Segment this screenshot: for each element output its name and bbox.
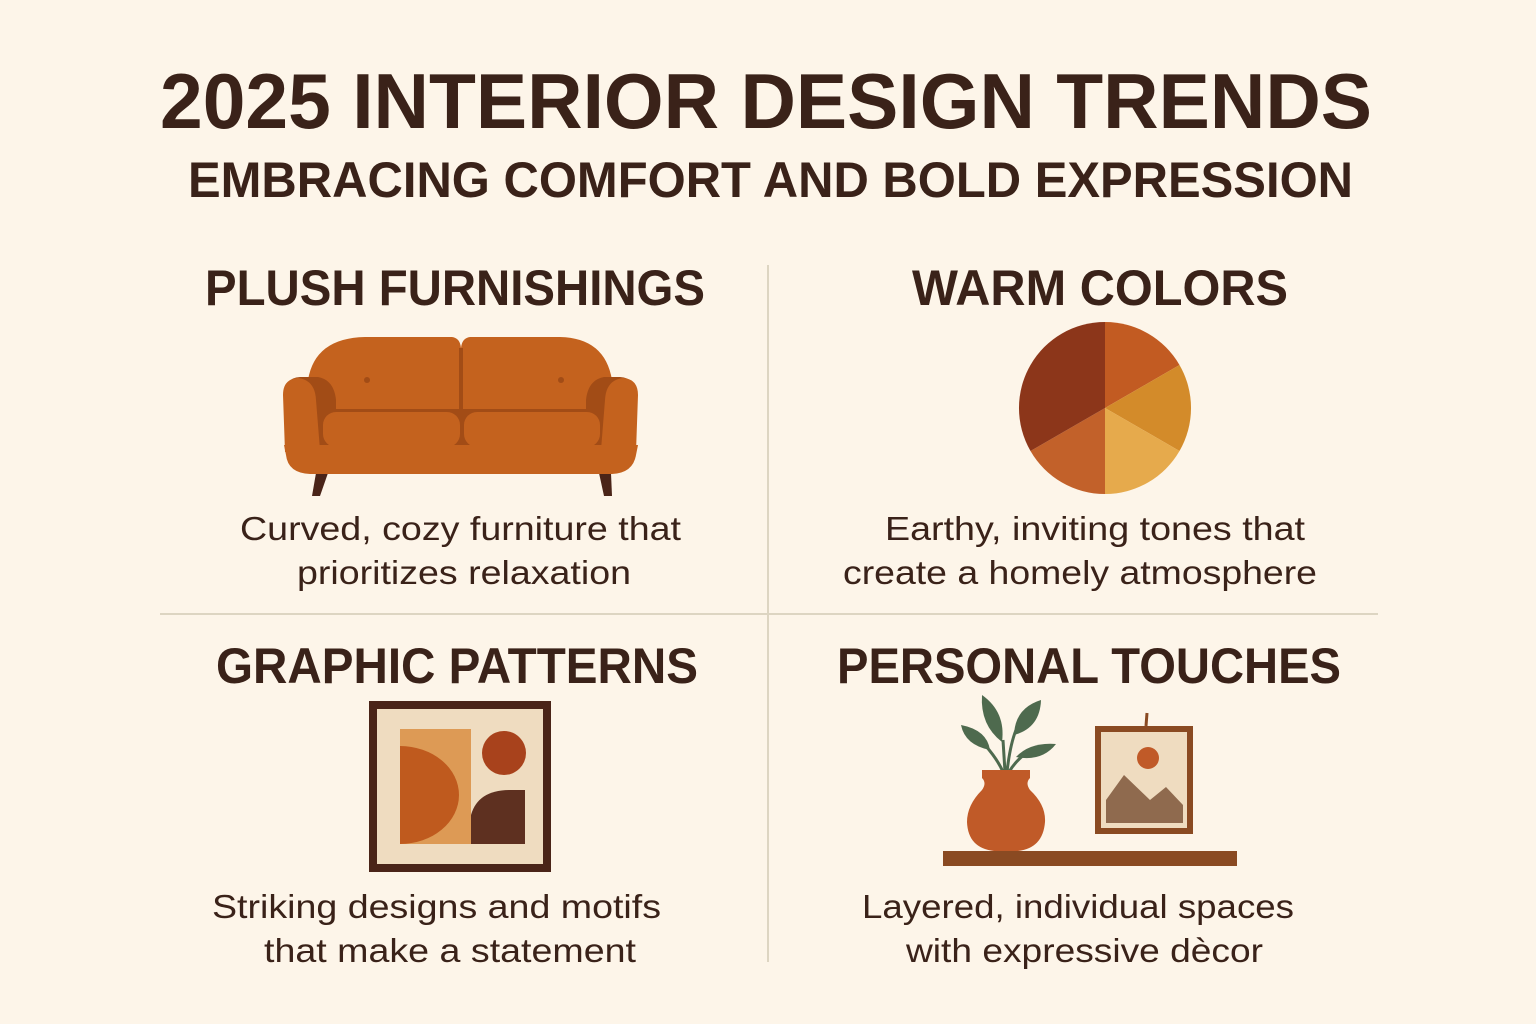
text: plush furnishings: Curved, cozy furniture that xyxy=(240,510,681,547)
text: personal touches xyxy=(862,888,1294,969)
heading: graphic patterns: GRAPHIC PATTERNS xyxy=(216,638,698,694)
panel: personal touches xyxy=(837,638,1341,969)
icon: framed art xyxy=(369,701,551,872)
text: warm colors: Earthy, inviting tones that xyxy=(885,510,1305,547)
heading: personal touches: PERSONAL TOUCHES xyxy=(837,638,1341,694)
text: warm colors xyxy=(843,510,1317,591)
title: 2025 INTERIOR DESIGN TRENDS xyxy=(160,57,1372,145)
text: personal touches: Layered, individual spaces xyxy=(862,888,1294,925)
panel: graphic patterns xyxy=(212,638,698,969)
text: warm colors: create a homely atmosphere xyxy=(843,554,1317,591)
text: plush furnishings xyxy=(240,510,681,591)
text: graphic patterns xyxy=(212,888,661,969)
subtitle: EMBRACING COMFORT AND BOLD EXPRESSION xyxy=(188,152,1353,208)
heading: warm colors: WARM COLORS xyxy=(912,260,1288,316)
panel: plush furnishings xyxy=(205,260,705,591)
panel: warm colors xyxy=(843,260,1317,591)
text: graphic patterns: that make a statement xyxy=(264,932,636,969)
icon: sofa xyxy=(283,337,638,496)
heading: plush furnishings: PLUSH FURNISHINGS xyxy=(205,260,705,316)
text: plush furnishings: prioritizes relaxation xyxy=(297,554,631,591)
icon: color wheel xyxy=(1019,322,1191,494)
text: personal touches: with expressive dècor xyxy=(905,932,1263,969)
text: graphic patterns: Striking designs and motifs xyxy=(212,888,661,925)
icon: plant, frame and shelf xyxy=(943,695,1237,866)
